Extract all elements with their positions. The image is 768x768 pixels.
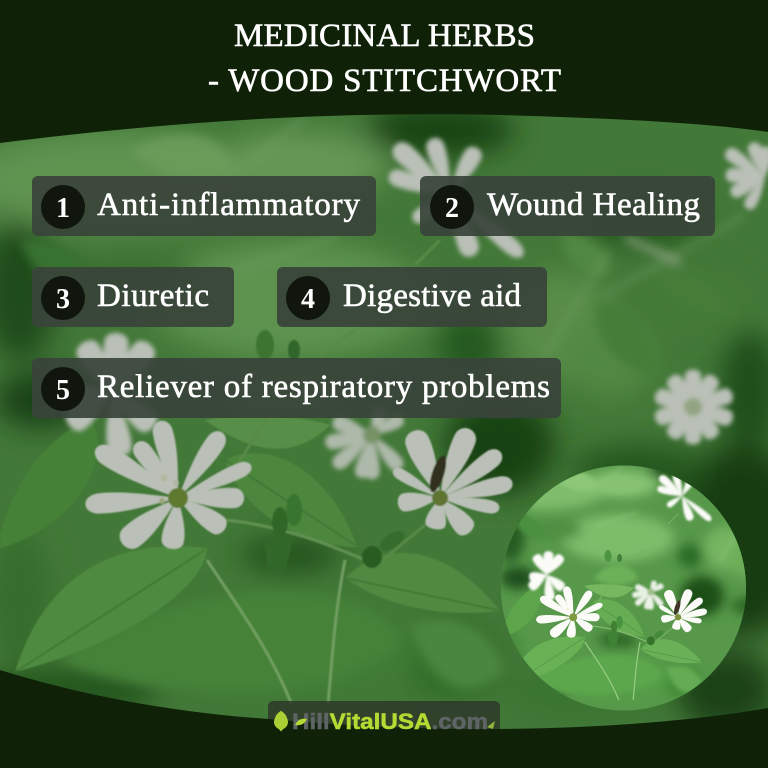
icon: hop cone [275,712,287,730]
inset circular photo [501,466,746,710]
benefit 2: 2 [445,193,459,224]
top dark band [0,0,768,143]
benefit 3 [32,267,234,327]
benefit 3: Diuretic [97,278,209,314]
benefit 5: Reliever of respiratory problems [97,369,550,405]
benefit 1: Anti-inflammatory [97,187,360,223]
benefit 1 [32,176,376,236]
icon: small leaf [487,721,495,729]
title: MEDICINAL HERBS [234,18,535,54]
benefit 2 [420,176,715,236]
benefit 5 [32,358,561,418]
benefit 4: 4 [301,284,315,315]
benefit 4 [277,267,547,327]
benefit 5: 5 [56,375,70,406]
bottom dark band [0,670,768,768]
benefit 2: Wound Healing [487,187,700,223]
title [208,18,561,99]
title: - WOOD STITCHWORT [208,63,561,99]
benefit 4: Digestive aid [343,278,522,314]
logo [275,709,495,734]
benefit 3: 3 [56,284,70,315]
logo plate [268,701,500,737]
logo text: HillVitalUSA .com [292,709,488,734]
icon: leaf [295,719,307,725]
benefit 1: 1 [56,193,70,224]
